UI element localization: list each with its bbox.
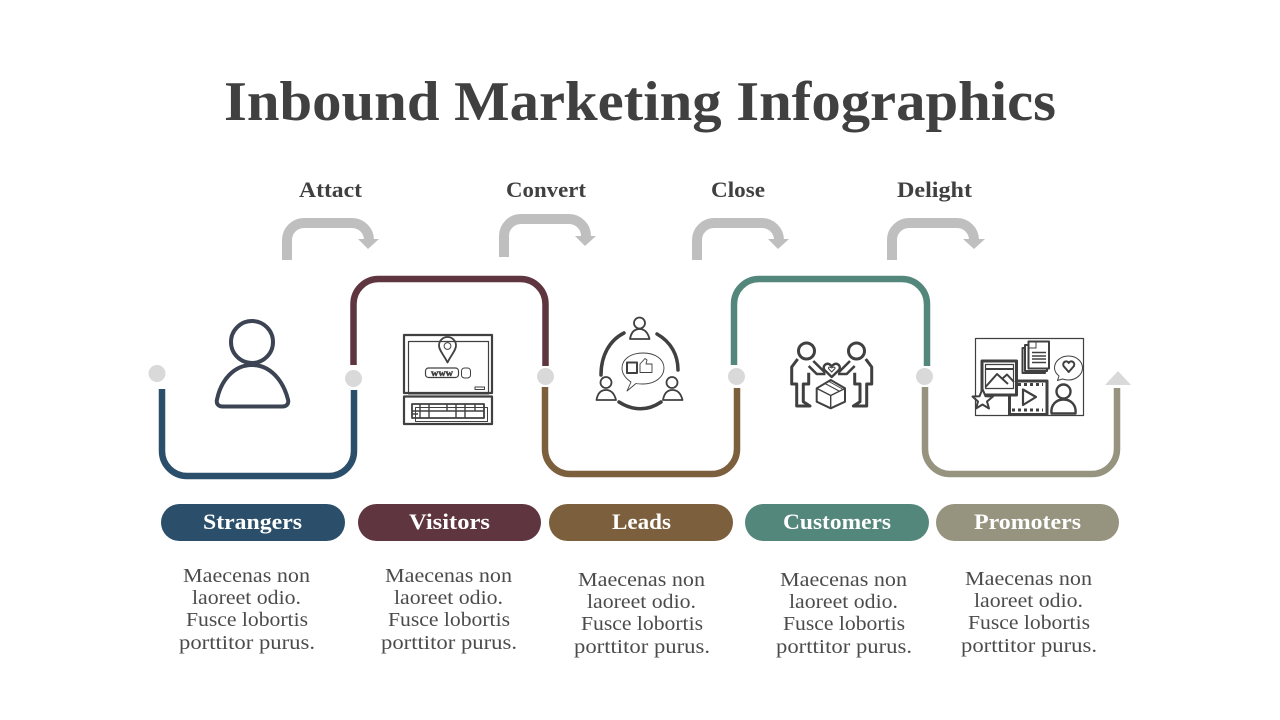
icon: customers with gift — [792, 343, 872, 408]
text: visitors: Maecenas non — [385, 565, 512, 587]
text: customers: Maecenas non — [780, 569, 907, 591]
segment: strangers — [162, 389, 354, 476]
segment: customers — [734, 279, 927, 366]
text: strangers: laoreet odio. — [192, 587, 301, 609]
pill: visitors: Visitors — [409, 509, 490, 534]
icon: content promotion — [972, 338, 1084, 416]
text: visitors: Fusce lobortis — [388, 609, 510, 631]
text: strangers: Maecenas non — [183, 565, 310, 587]
wave connector — [162, 279, 1117, 476]
stage labels and arrows — [287, 177, 985, 260]
text: visitors: porttitor purus. — [381, 632, 517, 654]
arrow: attack: Attact — [299, 177, 363, 202]
segment: visitors — [354, 279, 546, 366]
text: promoters — [961, 568, 1097, 657]
arrow: close — [697, 177, 789, 260]
text: strangers: Fusce lobortis — [186, 609, 308, 631]
connector dots — [148, 365, 933, 387]
text: leads: porttitor purus. — [574, 636, 710, 658]
segment: leads — [545, 387, 737, 474]
title: Inbound Marketing Infographics — [224, 71, 1056, 133]
text: leads: Fusce lobortis — [581, 613, 703, 635]
segment: promoters — [925, 387, 1117, 474]
text: strangers — [179, 565, 315, 654]
end arrowhead — [1105, 371, 1131, 385]
text: visitors: laoreet odio. — [394, 587, 503, 609]
text: leads — [574, 569, 710, 658]
arrow: convert: Convert — [506, 177, 587, 202]
text: promoters: Maecenas non — [965, 568, 1092, 590]
pill: leads — [549, 504, 733, 541]
text: leads: laoreet odio. — [587, 591, 696, 613]
icon: person — [217, 321, 288, 406]
stage pills — [161, 504, 1119, 541]
text: visitors — [381, 565, 517, 654]
pill: visitors — [358, 504, 541, 541]
text: promoters: porttitor purus. — [961, 635, 1097, 657]
text: customers: Fusce lobortis — [783, 613, 905, 635]
pill: strangers — [161, 504, 345, 541]
arrow: delight: Delight — [897, 177, 973, 202]
pill: customers — [745, 504, 929, 541]
icon: community feedback — [596, 318, 682, 409]
text: customers — [776, 569, 912, 658]
pill: promoters: Promoters — [974, 509, 1081, 534]
descriptions — [179, 565, 1097, 658]
arrow: close: Close — [711, 177, 765, 202]
text: promoters: Fusce lobortis — [968, 612, 1090, 634]
pill: strangers: Strangers — [203, 509, 302, 534]
icon: computer — [404, 335, 492, 424]
text: promoters: laoreet odio. — [974, 590, 1083, 612]
text: customers: porttitor purus. — [776, 636, 912, 658]
pill: customers: Customers — [783, 509, 891, 534]
arrow: convert — [504, 177, 596, 257]
text: leads: Maecenas non — [578, 569, 705, 591]
arrow: delight — [892, 177, 985, 260]
pill: leads: Leads — [612, 509, 671, 534]
text: customers: laoreet odio. — [789, 591, 898, 613]
text: strangers: porttitor purus. — [179, 632, 315, 654]
pill: promoters — [936, 504, 1119, 541]
arrow: attack — [287, 177, 379, 260]
icon: computer: www — [431, 368, 454, 378]
